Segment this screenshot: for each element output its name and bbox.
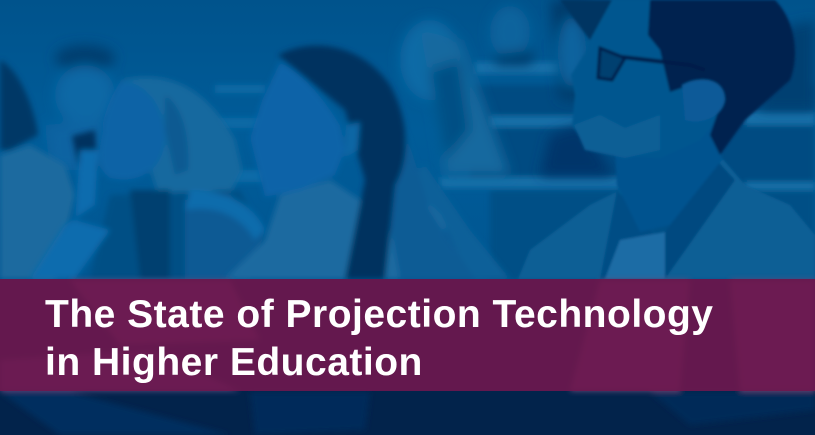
- left student: [30, 77, 265, 279]
- lower section below the banner: [0, 279, 815, 435]
- title: in Higher Education: [45, 341, 423, 384]
- far left student: [0, 60, 75, 279]
- title banner: [0, 279, 815, 391]
- centre student: [225, 46, 510, 279]
- title: [45, 293, 714, 384]
- lecture hall desks: [215, 62, 815, 280]
- right student with glasses: [518, 0, 815, 279]
- title: The State of Projection Technology: [45, 293, 714, 336]
- background students: [45, 0, 815, 176]
